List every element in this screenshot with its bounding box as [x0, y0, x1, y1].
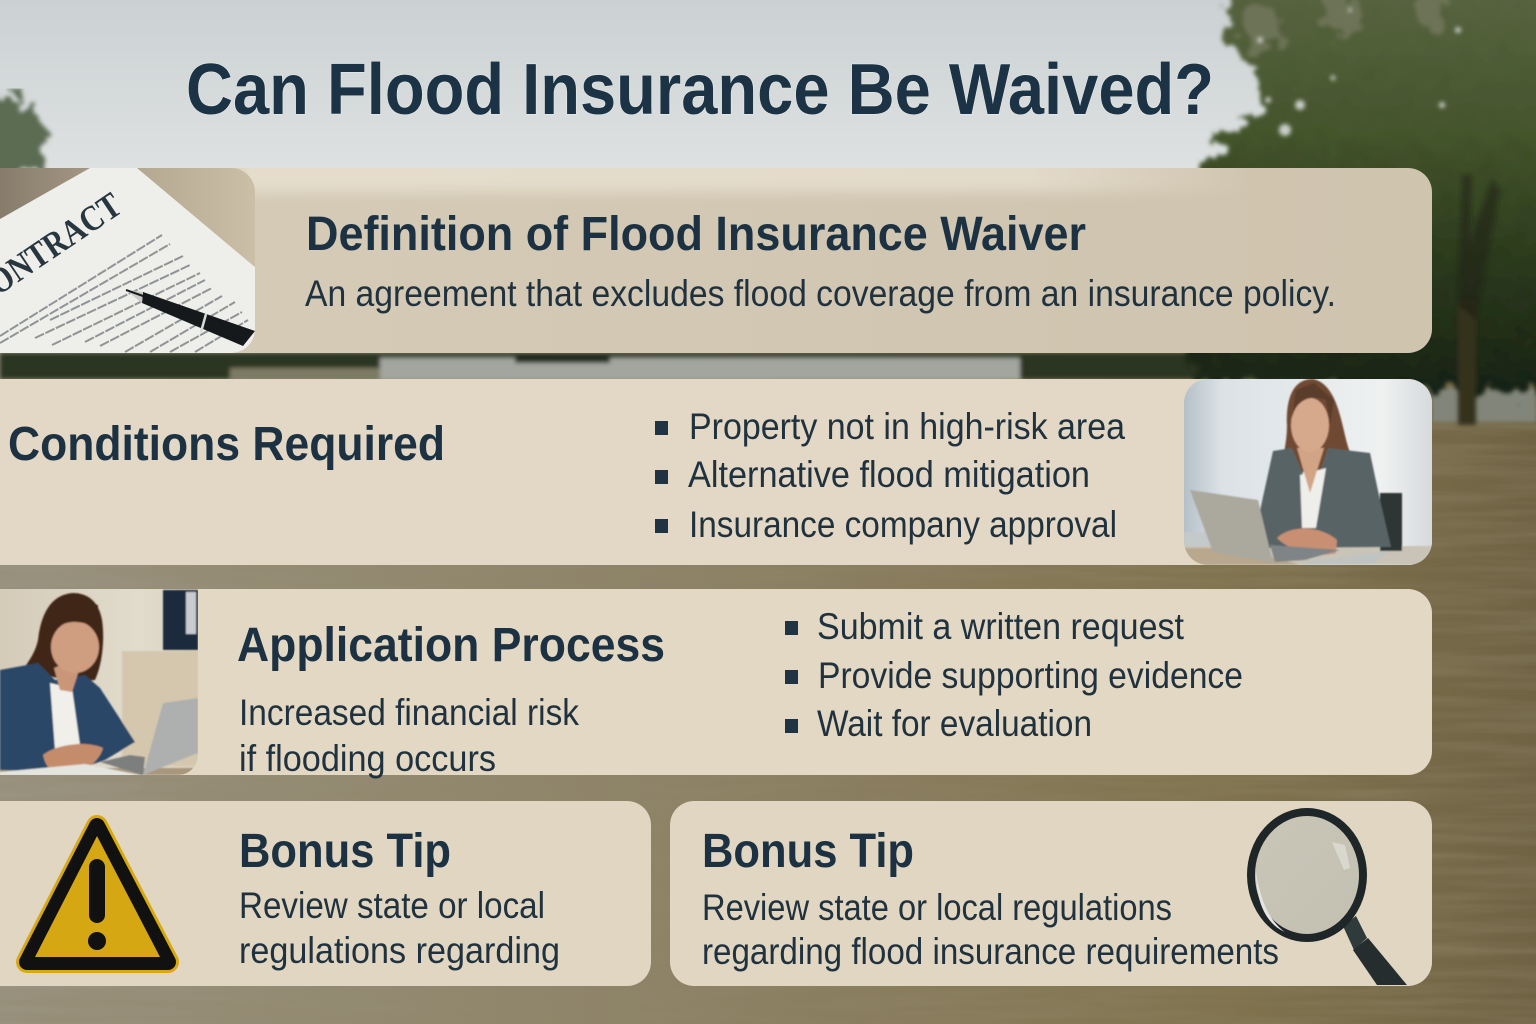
- heading: bonus tip left: Bonus Tip: [239, 825, 451, 878]
- list: conditions: Alternative flood mitigation: [688, 454, 1090, 495]
- heading: definition: Definition of Flood Insurance Waiver: [306, 208, 1086, 261]
- trees on the right: [1190, 0, 1536, 395]
- list: application steps: [785, 606, 1243, 744]
- panel: application process: [0, 589, 1432, 779]
- heading: conditions: Conditions Required: [8, 418, 445, 471]
- list: conditions: Property not in high-risk area: [689, 406, 1125, 447]
- text: bonus tip right: Review state or local regulations: [702, 887, 1172, 928]
- list: conditions: [655, 406, 1125, 545]
- text: bonus tip right: [702, 887, 1279, 972]
- image: woman in navy blazer writing: [0, 589, 198, 775]
- text: bonus tip left: [239, 885, 560, 971]
- icon: warning triangle: [27, 826, 168, 962]
- text: bonus tip left: regulations regarding: [239, 930, 560, 971]
- panel: bonus tip right: [670, 801, 1432, 986]
- list: application steps: Wait for evaluation: [817, 703, 1092, 744]
- heading: application: Application Process: [237, 619, 665, 672]
- icon: magnifying glass: [1251, 812, 1407, 985]
- text: application risk: if flooding occurs: [239, 738, 496, 779]
- text: bonus tip right: regarding flood insurance requirements: [702, 931, 1279, 972]
- image: contract and pen: [0, 168, 256, 353]
- panel: bonus tip left: [0, 801, 651, 986]
- list: application steps: Submit a written request: [817, 606, 1185, 647]
- tree trunk: [1458, 175, 1500, 425]
- list: conditions: Insurance company approval: [689, 504, 1117, 545]
- tree on the left: [0, 97, 51, 180]
- distant tree line and pale river: [0, 353, 1536, 422]
- panel: definition: [0, 150, 1432, 353]
- panel: conditions required: [0, 379, 1432, 565]
- heading: bonus tip right: Bonus Tip: [702, 825, 914, 878]
- image: woman in grey blazer at laptop: [1184, 379, 1432, 565]
- text: application risk: Increased financial risk: [239, 692, 579, 733]
- list: application steps: Provide supporting evidence: [818, 655, 1243, 696]
- text: application risk: [239, 692, 579, 779]
- text: definition body: An agreement that excludes flood coverage from an insurance policy.: [305, 273, 1336, 314]
- title: Can Flood Insurance Be Waived?: [186, 50, 1214, 130]
- pen: [126, 290, 255, 346]
- text: bonus tip left: Review state or local: [239, 885, 545, 926]
